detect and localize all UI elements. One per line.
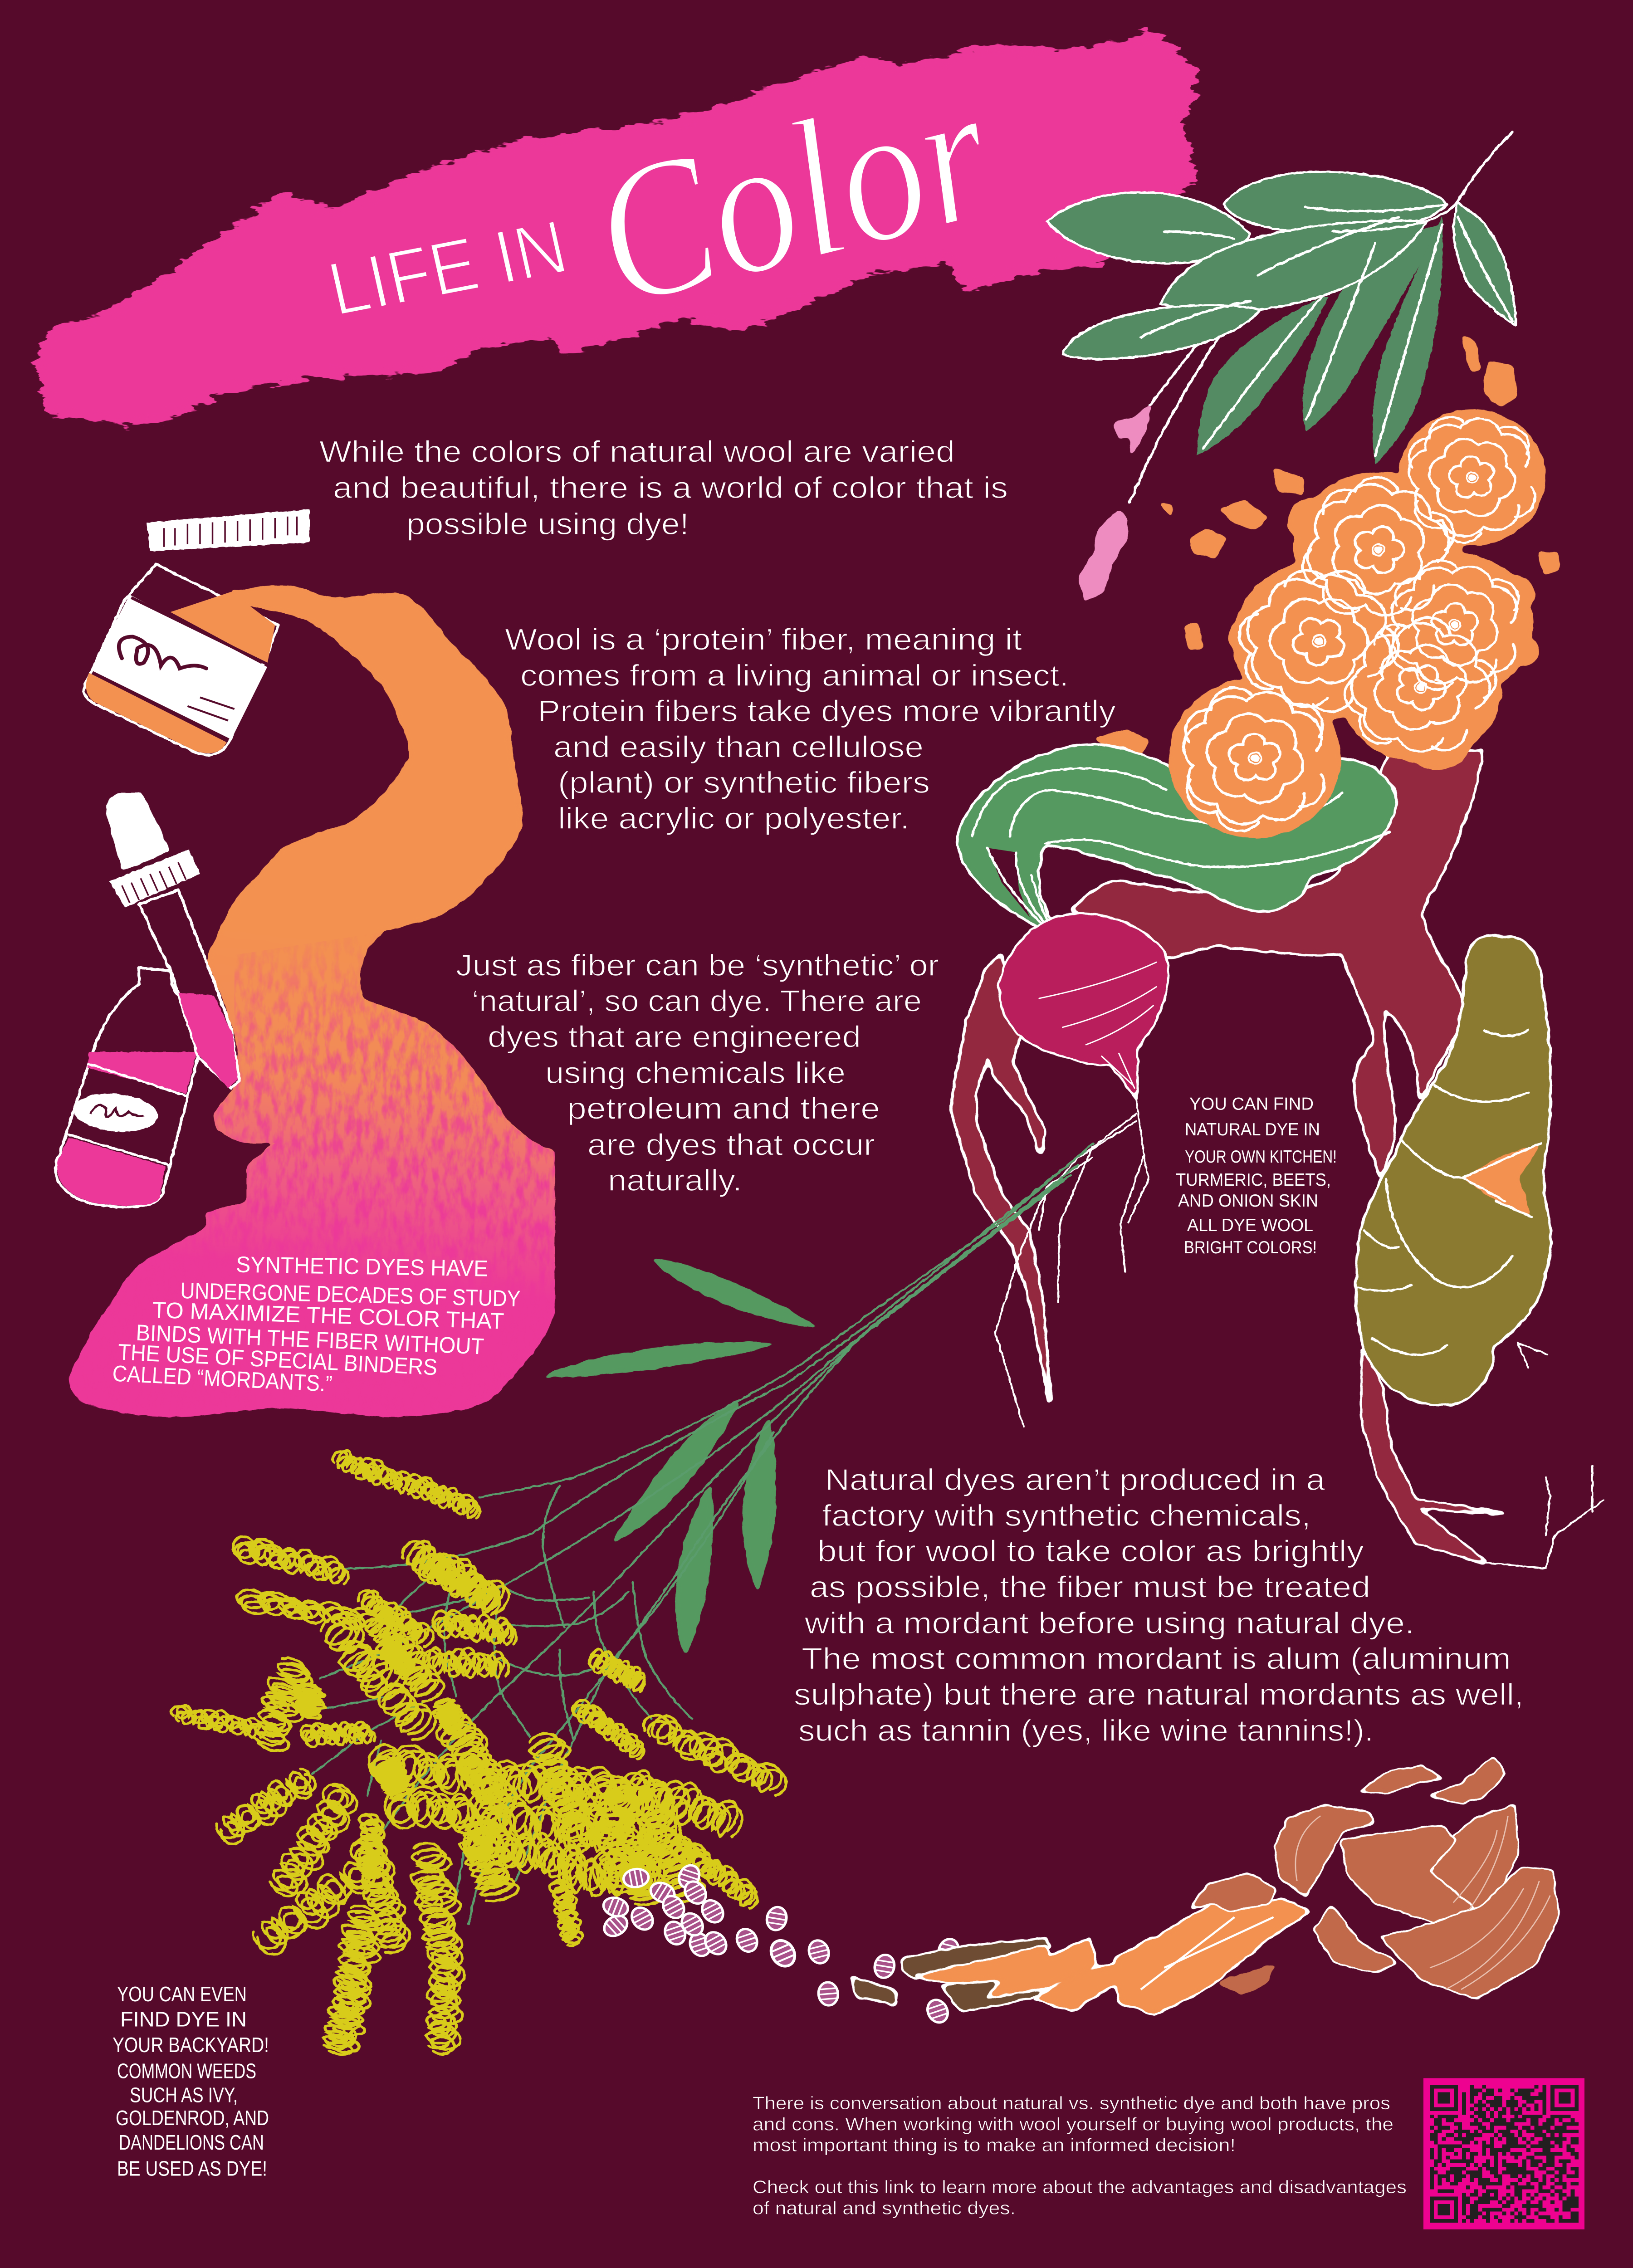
beet leaves	[958, 746, 1395, 929]
illustration: purple seeds	[600, 1862, 961, 2025]
text block: protein fiber: like acrylic or polyester.	[558, 801, 909, 835]
text block: synthetic or natural: naturally.	[608, 1163, 742, 1197]
illustration: onion skins	[1193, 1758, 1558, 1998]
callout: kitchen dyes: BRIGHT COLORS!	[1184, 1237, 1317, 1257]
text block: mordants	[794, 1463, 1524, 1747]
text block: mordants: sulphate) but there are natural mordants as well,	[794, 1677, 1524, 1711]
text block: mordants: with a mordant before using natural dye.	[804, 1606, 1414, 1640]
callout: backyard dyes: YOUR BACKYARD!	[112, 2033, 269, 2057]
callout: backyard dyes: COMMON WEEDS	[117, 2059, 256, 2083]
brown bark	[853, 1939, 1083, 2010]
text block: synthetic or natural: petroleum and there	[567, 1091, 880, 1125]
dropper liquid	[178, 992, 238, 1088]
callout: synthetic dyes: TO MAXIMIZE THE COLOR THAT	[152, 1297, 504, 1334]
illustration: jar and lid	[84, 509, 309, 755]
title: color: Color	[570, 40, 1017, 347]
callout: synthetic dyes: BINDS WITH THE FIBER WITHOUT	[135, 1320, 484, 1359]
jar lid	[147, 509, 309, 551]
long leaves	[539, 1259, 821, 1657]
qr finder patterns	[1430, 2085, 1579, 2223]
flower blobs	[1169, 410, 1545, 838]
mottled pink texture	[69, 932, 555, 1417]
callout: kitchen dyes: YOU CAN FIND	[1189, 1094, 1314, 1114]
callout: backyard dyes	[112, 1983, 269, 2180]
text block: footer: of natural and synthetic dyes.	[753, 2198, 1016, 2218]
skin c	[1381, 1868, 1558, 1998]
text block: intro	[319, 435, 1008, 541]
callout: synthetic dyes: CALLED “MORDANTS.”	[112, 1361, 333, 1397]
illustration: beet and roots	[952, 746, 1481, 1427]
text block: intro: While the colors of natural wool are varied	[319, 435, 955, 469]
thin roots	[995, 1097, 1149, 1427]
tiny skin	[1216, 1964, 1275, 1995]
turmeric tail root	[1363, 1349, 1505, 1563]
text block: synthetic or natural: are dyes that occur	[587, 1128, 875, 1162]
text block: footer: most important thing is to make an informed decision!	[753, 2135, 1236, 2155]
callout: synthetic dyes: SYNTHETIC DYES HAVE	[236, 1252, 489, 1281]
callout: backyard dyes: YOU CAN EVEN	[117, 1983, 247, 2006]
text block: synthetic or natural: using chemicals like	[545, 1056, 846, 1090]
pink petals	[1078, 402, 1152, 602]
illustration: turmeric root	[1358, 937, 1604, 1569]
text block: protein fiber	[505, 622, 1116, 835]
text block: mordants: Natural dyes aren’t produced in a	[825, 1463, 1325, 1497]
text block: mordants: The most common mordant is alum (aluminum	[802, 1642, 1511, 1676]
text block: mordants: factory with synthetic chemicals,	[822, 1498, 1311, 1532]
text block: mordants: but for wool to take color as brightly	[817, 1534, 1364, 1568]
illustration: goldenrod	[170, 1143, 1094, 2058]
callout: synthetic dyes	[112, 1252, 521, 1397]
jar body	[84, 564, 278, 755]
stems	[308, 1143, 1094, 1924]
orange flecks	[1047, 336, 1560, 816]
text block: mordants: such as tannin (yes, like wine tannins!).	[798, 1713, 1374, 1747]
yellow flower spikes	[170, 1445, 792, 2058]
small skins	[1193, 1758, 1505, 1972]
callout: kitchen dyes: TURMERIC, BEETS,	[1176, 1169, 1331, 1190]
callout: backyard dyes: SUCH AS IVY,	[130, 2083, 238, 2107]
beet streaks	[1039, 962, 1156, 1088]
bottle	[55, 968, 199, 1207]
illustration: marigold flowers	[1161, 408, 1548, 848]
turmeric orange notch	[1463, 1143, 1541, 1217]
text block: protein fiber: Wool is a ‘protein’ fiber, meaning it	[505, 622, 1022, 656]
text block: footer: and cons. When working with wool yourself or buying wool products, the	[753, 2114, 1393, 2134]
title: life in: LIFE IN	[321, 204, 575, 332]
text block: protein fiber: (plant) or synthetic fibers	[558, 766, 930, 800]
turmeric fine roots	[1486, 1343, 1604, 1569]
flower rosettes	[1161, 408, 1548, 848]
text block: intro: possible using dye!	[406, 507, 689, 541]
title brush stroke	[36, 26, 1197, 425]
title	[321, 40, 1017, 347]
dropper tube	[139, 890, 239, 1088]
qr data modules	[1430, 2087, 1579, 2221]
text block: intro: and beautiful, there is a world of color that is	[333, 471, 1008, 505]
text block: footer	[753, 2092, 1407, 2218]
skin b	[1342, 1826, 1475, 1921]
text block: protein fiber: and easily than cellulose	[553, 730, 924, 764]
text block: synthetic or natural: ‘natural’, so can dye. There are	[472, 984, 922, 1018]
illustration: leaf branch	[1047, 132, 1516, 502]
skin streaks	[1296, 1816, 1550, 1989]
bark streaks	[1141, 1917, 1274, 1989]
callout: backyard dyes: FIND DYE IN	[120, 2008, 247, 2031]
dropper bulb	[105, 793, 171, 871]
text block: synthetic or natural: Just as fiber can be ‘synthetic’ or	[456, 948, 939, 982]
qr code	[1423, 2078, 1584, 2229]
text block: mordants: as possible, the fiber must be treated	[810, 1570, 1370, 1604]
callout: kitchen dyes: ALL DYE WOOL	[1187, 1215, 1313, 1235]
skin a	[1381, 1806, 1517, 1921]
callout: kitchen dyes: NATURAL DYE IN	[1185, 1119, 1320, 1139]
illustration: dropper and bottle	[55, 793, 239, 1207]
callout: backyard dyes: BE USED AS DYE!	[117, 2157, 267, 2180]
callout: kitchen dyes	[1176, 1094, 1337, 1257]
callout: backyard dyes: DANDELIONS CAN	[119, 2131, 264, 2154]
turmeric body	[1358, 937, 1549, 1404]
text block: footer: There is conversation about natural vs. synthetic dye and both have pros	[753, 2092, 1390, 2113]
orange bark	[916, 1900, 1308, 2014]
text block: footer: Check out this link to learn more about the advantages and disadvantages	[753, 2177, 1407, 2197]
callout: synthetic dyes: THE USE OF SPECIAL BINDERS	[117, 1339, 438, 1380]
text block: synthetic or natural: dyes that are engineered	[488, 1020, 861, 1054]
illustration: bark pieces	[853, 1900, 1308, 2014]
paint pour blob	[69, 585, 555, 1417]
callout: backyard dyes: GOLDENROD, AND	[116, 2107, 269, 2130]
callout: kitchen dyes: AND ONION SKIN	[1178, 1191, 1318, 1211]
leaves	[1047, 171, 1516, 464]
text block: synthetic or natural	[456, 948, 939, 1197]
callout: synthetic dyes: UNDERGONE DECADES OF STUDY	[180, 1278, 521, 1312]
turmeric contour lines	[1358, 1030, 1541, 1355]
dropper collar	[109, 849, 200, 907]
beet bulb	[1000, 914, 1168, 1097]
leaf stem and veins	[1130, 132, 1513, 502]
text block: protein fiber: Protein fibers take dyes more vibrantly	[538, 694, 1116, 728]
callout: kitchen dyes: YOUR OWN KITCHEN!	[1185, 1146, 1337, 1167]
left beet root	[952, 956, 1050, 1403]
text block: protein fiber: comes from a living animal or insect.	[520, 659, 1069, 692]
beet root main	[1074, 751, 1481, 1178]
